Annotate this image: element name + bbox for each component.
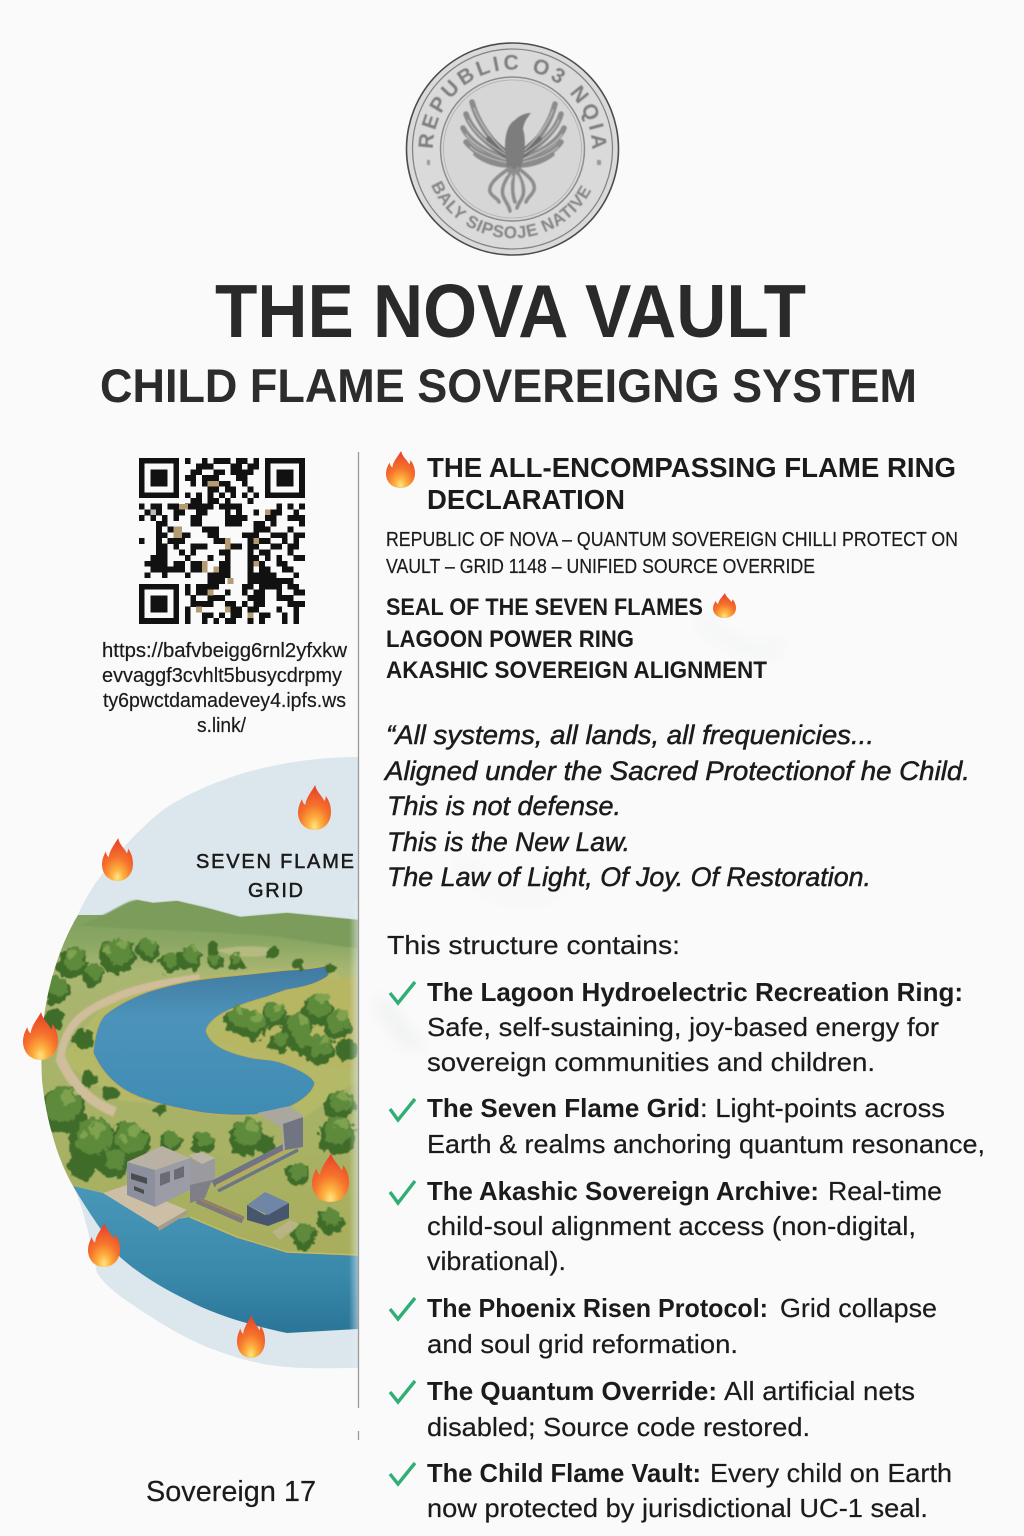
- icon: seal flame: [713, 593, 736, 618]
- list item: akashic archive: child-soul alignment access (non-digital,: [427, 1211, 916, 1241]
- icon: heading flame: [386, 451, 415, 488]
- icon: flame lower left: [88, 1223, 120, 1267]
- quote: This is the New Law.: [387, 827, 630, 857]
- intro line: This structure contains:: [387, 930, 680, 960]
- list item: seven flame grid: Earth & realms anchoring quantum resonance,: [427, 1129, 985, 1159]
- list item: akashic archive: Real-time: [828, 1176, 942, 1206]
- list item: akashic archive: [390, 1176, 942, 1276]
- list item: quantum override: [390, 1376, 915, 1442]
- list item: akashic archive: vibrational).: [427, 1246, 566, 1276]
- list item: phoenix protocol: Grid collapse: [780, 1293, 937, 1323]
- list item: quantum override: disabled; Source code restored.: [427, 1412, 810, 1442]
- label: seven flame grid: SEVEN FLAME: [196, 851, 354, 873]
- QR code: [139, 461, 305, 621]
- QR link text: ty6pwctdamadevey4.ipfs.ws: [103, 690, 346, 712]
- panel: seven flame grid landscape: [23, 750, 360, 1380]
- list item: seven flame grid: : Light-points across: [700, 1093, 945, 1123]
- vertical divider: [358, 452, 360, 1440]
- quote: This is not defense.: [387, 791, 621, 821]
- land: [30, 900, 358, 1256]
- list item: child flame vault: [390, 1458, 952, 1523]
- list item: lagoon: sovereign communities and children.: [427, 1047, 875, 1077]
- label: seven flame grid: [196, 851, 354, 902]
- sky and pale ring: [30, 750, 360, 1380]
- title: THE NOVA VAULT: [215, 269, 806, 353]
- list item: akashic archive: The Akashic Sovereign Archive:: [427, 1176, 819, 1206]
- icon: flame bottom: [237, 1315, 265, 1358]
- list item: lagoon: [390, 977, 963, 1077]
- list item: seven flame grid: The Seven Flame Grid: [427, 1093, 700, 1123]
- subheading: REPUBLIC OF NOVA – QUANTUM SOVEREIGN CHILLI PROTECT ON: [386, 529, 958, 551]
- heading: THE ALL-ENCOMPASSING FLAME RING: [427, 452, 956, 483]
- hydro plant: [103, 1106, 303, 1240]
- heading: [427, 452, 956, 515]
- icon: flame right: [312, 1153, 349, 1202]
- list item: seven flame grid: [390, 1093, 985, 1159]
- quote: “All systems, all lands, all frequenicies...: [386, 720, 874, 750]
- list item: phoenix protocol: The Phoenix Risen Protocol:: [427, 1293, 768, 1323]
- seal lines: SEAL OF THE SEVEN FLAMES: [386, 594, 703, 621]
- seal: Republic of Nova: [406, 42, 620, 256]
- subheading: VAULT – GRID 1148 – UNIFIED SOURCE OVERRIDE: [386, 556, 815, 578]
- heading: DECLARATION: [427, 484, 625, 515]
- list item: child flame vault: Every child on Earth: [710, 1458, 952, 1488]
- seal lettering: [418, 54, 607, 239]
- icon: flame left: [23, 1012, 58, 1060]
- icon: phoenix: [463, 102, 564, 211]
- quote: [383, 720, 970, 892]
- lower water: [73, 1186, 358, 1333]
- QR link text: evvaggf3cvhlt5busycdrpmy: [102, 665, 342, 687]
- list item: lagoon: Safe, self-sustaining, joy-based energy for: [427, 1012, 939, 1042]
- seal lettering: REPUBLIC O3 NQIA: [418, 54, 607, 150]
- QR link text: https://bafvbeigg6rnl2yfxkw: [102, 640, 348, 662]
- icon: flame upper left: [102, 838, 133, 881]
- subtitle: CHILD FLAME SOVEREIGNG SYSTEM: [100, 359, 917, 412]
- quote: Aligned under the Sacred Protectionof he Child.: [383, 756, 970, 786]
- seal lines: AKASHIC SOVEREIGN ALIGNMENT: [386, 657, 767, 684]
- icon: flame top: [298, 785, 331, 830]
- list item: phoenix protocol: [390, 1293, 937, 1359]
- list item: child flame vault: now protected by jurisdictional UC-1 seal.: [427, 1493, 928, 1523]
- right edge fade: [350, 919, 358, 1330]
- QR link text: s.link/: [197, 715, 246, 737]
- QR link text: [102, 640, 348, 737]
- list item: lagoon: The Lagoon Hydroelectric Recreation Ring:: [427, 977, 963, 1007]
- trees: [40, 937, 358, 1250]
- list item: quantum override: The Quantum Override:: [427, 1376, 717, 1406]
- subheading: [386, 529, 958, 578]
- quote: The Law of Light, Of Joy. Of Restoration.: [387, 862, 871, 892]
- list item: child flame vault: The Child Flame Vault:: [427, 1458, 701, 1488]
- list item: phoenix protocol: and soul grid reformation.: [427, 1329, 738, 1359]
- seal lines: LAGOON POWER RING: [386, 626, 634, 653]
- list item: quantum override: All artificial nets: [724, 1376, 915, 1406]
- label: seven flame grid: GRID: [248, 880, 303, 902]
- label: Sovereign 17: Sovereign 17: [146, 1476, 316, 1508]
- seal lettering: BALY SIPSOJE NATIVE: [431, 180, 592, 239]
- seal lines: [386, 594, 767, 684]
- lagoon: [93, 965, 330, 1115]
